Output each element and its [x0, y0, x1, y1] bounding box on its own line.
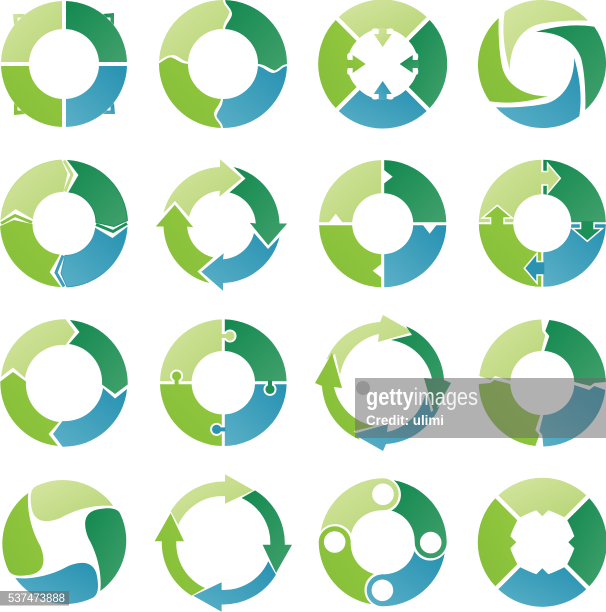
segment: blue — [66, 66, 127, 127]
segment: blue — [339, 81, 427, 129]
tab: green knob — [170, 370, 183, 385]
segment: light green — [479, 320, 545, 381]
tab: dark green arrow — [574, 221, 600, 240]
segment: green — [0, 372, 59, 446]
diagram: ring with interlocking arrow tabs — [479, 160, 606, 287]
segment: green — [478, 498, 517, 586]
petal: blue — [15, 563, 98, 604]
image id tag — [0, 591, 69, 606]
segment: green — [160, 384, 222, 446]
arrow: green — [315, 353, 375, 440]
arrow: blue — [353, 391, 440, 451]
segment: light green — [339, 0, 427, 47]
arrow: green — [156, 205, 214, 283]
segment: dark green — [384, 160, 446, 222]
segment: light green — [319, 160, 381, 223]
segment: green — [318, 20, 366, 108]
segment: light green — [503, 0, 588, 70]
segment: dark green — [68, 160, 127, 232]
segment: blue — [543, 224, 606, 287]
petal: dark green — [85, 508, 126, 591]
diagram: leaf-shaped petals — [2, 480, 126, 604]
diagram: ring with jagged joints — [479, 320, 606, 446]
segment: blue — [539, 385, 605, 446]
tab: light green knob — [221, 330, 236, 342]
segment: light green — [321, 478, 399, 534]
arrow: dark green — [391, 326, 451, 413]
diagram: four sectors with toothed centre — [478, 478, 606, 607]
diagram: ring with triangular notches — [319, 160, 446, 287]
segment: light green — [160, 319, 222, 381]
segment: dark green — [543, 160, 606, 222]
arrow: light green — [171, 474, 253, 525]
petal: green — [2, 493, 43, 576]
segment: blue — [225, 384, 287, 446]
segment: light green — [1, 319, 75, 378]
segment: blue — [56, 228, 127, 287]
arrow: green — [155, 513, 205, 596]
segment: dark green — [391, 480, 447, 558]
segment: green — [319, 526, 374, 604]
arrow: blue — [201, 233, 280, 291]
segment: blue — [215, 65, 288, 129]
segment: dark green — [69, 320, 128, 394]
segment: light green — [1, 160, 72, 220]
segment: dark green — [400, 20, 447, 108]
segment: light green — [479, 160, 541, 222]
image id number: 537473888 — [8, 593, 65, 605]
arrow: light green — [164, 159, 242, 217]
segment: dark green — [567, 498, 606, 586]
segment: green — [158, 56, 222, 129]
segment: green — [1, 66, 62, 127]
segment: blue — [498, 567, 586, 607]
diagram: jigsaw puzzle ring — [160, 319, 287, 446]
segment: dark green — [536, 25, 606, 110]
tab: light green arrow — [540, 165, 559, 191]
watermark band — [355, 378, 606, 438]
tab: blue knob — [210, 423, 225, 436]
diagram: four sectors with inward arrows — [318, 0, 447, 129]
diagram: tapered arrows in a cycle — [315, 315, 451, 451]
diagram: swirl aperture — [478, 0, 606, 128]
tab: dark green knob — [264, 381, 276, 396]
segment: green — [1, 216, 60, 286]
segment: green — [478, 18, 548, 103]
segment: dark green — [224, 0, 288, 72]
petal: light green — [31, 480, 113, 521]
segment: light green — [158, 0, 231, 63]
segment: light green — [1, 1, 62, 62]
arrow: light green — [326, 315, 413, 375]
diagram: ring with corner triangles — [1, 1, 127, 127]
diagram: ring with wavy joints — [158, 0, 288, 129]
watermark credit text: Credit: ulimi — [366, 413, 444, 428]
segment: blue — [496, 58, 581, 128]
arrow: blue — [193, 561, 276, 612]
segment: blue — [384, 225, 446, 287]
segment: light green — [498, 478, 586, 517]
diagram: ring with chevron joints — [1, 160, 127, 287]
diagram: thin ring of chevron arrows — [0, 319, 128, 447]
diagram: four block arrows in a cycle — [156, 159, 287, 291]
diagram: slim arrows in a cycle — [155, 474, 292, 612]
segment: dark green — [66, 1, 127, 62]
segment: blue — [53, 388, 127, 447]
segment: green — [479, 224, 541, 287]
tab: blue arrow — [525, 255, 544, 281]
tab: green arrow — [484, 206, 510, 225]
segment: dark green — [225, 319, 287, 381]
segment: green — [479, 380, 540, 446]
segment: dark green — [544, 320, 606, 386]
segment: green — [319, 225, 382, 287]
arrow: dark green — [242, 490, 292, 573]
segment: blue — [367, 551, 445, 606]
watermark logo text: gettyimages — [366, 384, 478, 411]
diagram: ring with circular holes — [319, 478, 447, 606]
arrow: dark green — [230, 167, 287, 245]
